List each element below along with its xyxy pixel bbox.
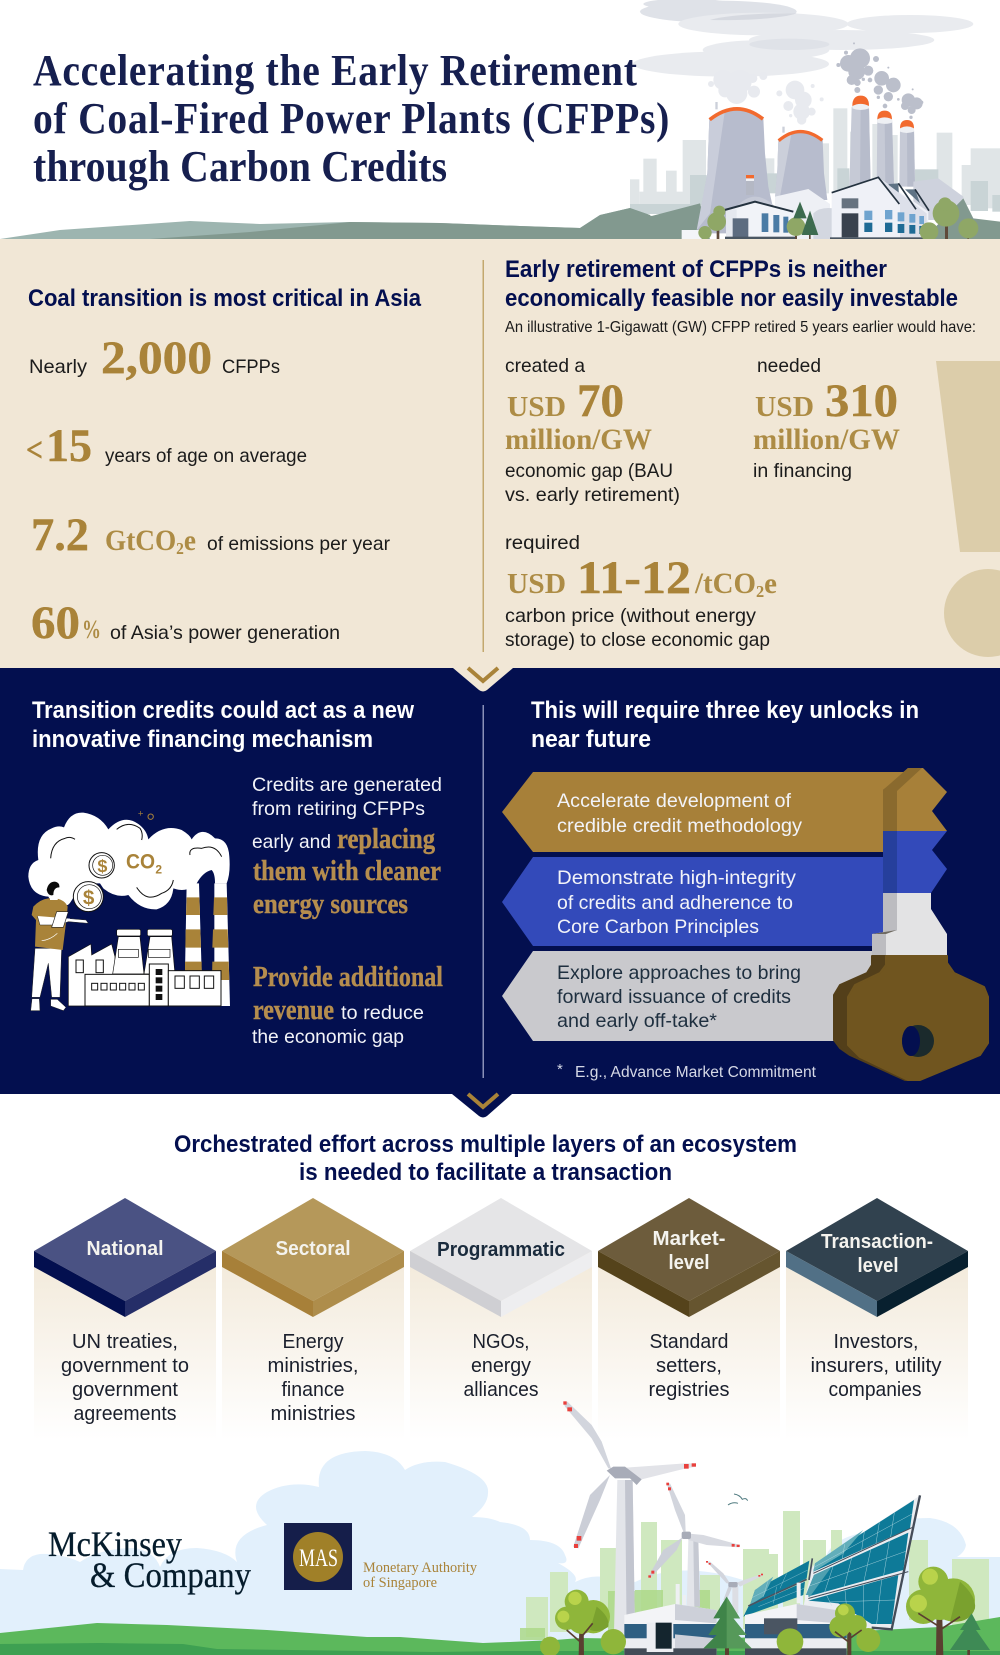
logo: McKinsey & Company: McKinsey	[48, 1524, 182, 1564]
stat: USD 11-12 per tCO2e: carbon price (without energy	[505, 605, 756, 627]
stat: USD 70 million per GW: 70	[577, 375, 624, 427]
text: additional revenue: to reduce	[341, 1002, 424, 1024]
column: Programmatic: NGOs,	[472, 1331, 530, 1353]
icon: key	[834, 768, 988, 1080]
stat: USD 70 million per GW: vs. early retirement)	[505, 484, 680, 506]
banner: accelerate development	[502, 772, 905, 852]
column: Programmatic: energy	[471, 1355, 531, 1377]
banner: accelerate development: credible credit methodology	[557, 815, 802, 837]
column: Sectoral: Energy	[282, 1331, 344, 1353]
stat: 2,000 CFPPs: 2,000	[101, 332, 212, 384]
column: Transaction-level: level	[858, 1255, 898, 1277]
text: credits generation	[252, 774, 442, 920]
stat: USD 11-12 per tCO2e: /tCO	[695, 567, 758, 600]
heading: orchestrated effort	[174, 1131, 797, 1186]
column: National: UN treaties,	[72, 1331, 178, 1353]
header illustration: coal plant	[630, 0, 1000, 241]
stat: USD 11-12 per tCO2e	[505, 532, 777, 651]
heading: key unlocks: near future	[531, 726, 651, 753]
icon: person, CO2 cloud, coins and factory: CO	[126, 849, 155, 873]
column: Market-level	[598, 1198, 780, 1440]
panel: beige band background	[0, 239, 1000, 668]
column: National: government	[72, 1379, 178, 1401]
stat: USD 70 million per GW: economic gap (BAU	[505, 460, 673, 482]
banner: demonstrate integrity: of credits and adherence to	[557, 892, 793, 914]
logo: McKinsey & Company: & Company	[90, 1555, 251, 1595]
stat: 7.2 GtCO2e: GtCO	[105, 524, 183, 557]
column: Transaction-level: insurers, utility	[810, 1355, 942, 1377]
icon: person, CO2 cloud, coins and factory: $	[97, 856, 107, 876]
icon: large exclamation mark dot	[944, 569, 1000, 657]
stat: 7.2 GtCO2e	[31, 509, 390, 561]
text: additional revenue	[252, 961, 443, 1048]
column: Programmatic: alliances	[464, 1379, 538, 1401]
column: Market-level: Market-	[652, 1228, 726, 1250]
column: Transaction-level: Transaction-	[821, 1231, 933, 1253]
stat: 2,000 CFPPs: Nearly	[29, 356, 87, 378]
stat: 60 percent: 60	[31, 597, 80, 649]
panel: three key unlocks	[502, 697, 988, 1081]
stat: 60 percent	[31, 597, 340, 649]
heading: orchestrated effort: Orchestrated effort across multiple layers of an ecosystem	[174, 1131, 797, 1158]
stat: USD 70 million per GW: million/GW	[505, 423, 652, 456]
stat: USD 11-12 per tCO2e: required	[505, 532, 580, 554]
stat: USD 11-12 per tCO2e: storage) to close economic gap	[505, 629, 770, 651]
column: Sectoral: finance	[282, 1379, 344, 1401]
logo: Monetary Authority of Singapore: MAS	[299, 1545, 338, 1572]
banner: forward issuance: forward issuance of credits	[557, 986, 791, 1008]
column: Market-level: setters,	[656, 1355, 722, 1377]
stat: USD 70 million per GW: created a	[505, 355, 585, 377]
panel: navy band background	[0, 668, 1000, 1094]
text: additional revenue: revenue	[253, 994, 334, 1026]
panel: transition credits	[28, 697, 443, 1048]
column: National: National	[86, 1238, 164, 1260]
stat: USD 11-12 per tCO2e: 2	[756, 582, 764, 601]
arrow: chevron tab into navy section	[453, 668, 513, 692]
stat: USD 11-12 per tCO2e: 11-12	[577, 552, 691, 604]
header hills	[0, 208, 650, 239]
icon: person, CO2 cloud, coins and factory	[28, 811, 230, 1011]
footer illustration: cloud and hills	[0, 1451, 1000, 1655]
title: of Coal-Fired Power Plants (CFPPs)	[33, 95, 669, 144]
heading: orchestrated effort: is needed to facilitate a transaction	[299, 1159, 672, 1186]
heading: key unlocks	[531, 697, 919, 753]
column: Sectoral	[222, 1198, 404, 1440]
icon: person, CO2 cloud, coins and factory: 2	[155, 862, 162, 876]
stat: 2,000 CFPPs	[29, 332, 280, 384]
heading: early retirement: Early retirement of CFPPs is neither	[505, 256, 887, 283]
column: Transaction-level: Investors,	[834, 1331, 918, 1353]
column: Transaction-level: companies	[828, 1379, 922, 1401]
footnote: E.g., Advance Market Commitment	[575, 1064, 817, 1081]
text: credits generation: energy sources	[253, 888, 408, 920]
icon: large exclamation mark bar	[936, 361, 1000, 552]
column: Programmatic: Programmatic	[437, 1239, 565, 1261]
heading: transition credits	[32, 697, 414, 753]
banner: accelerate development: Accelerate development of	[557, 790, 792, 812]
column: Sectoral: Sectoral	[276, 1238, 350, 1260]
column: Market-level: level	[668, 1252, 710, 1274]
text: credits generation: replacing	[337, 823, 435, 855]
stat: USD 70 million per GW	[505, 355, 680, 506]
column: Sectoral: ministries	[270, 1403, 356, 1425]
text: credits generation: them with cleaner	[253, 855, 441, 887]
heading: coal transition: Coal transition is most critical in Asia	[28, 285, 422, 312]
text: additional revenue: Provide additional	[253, 961, 443, 993]
banner: forward issuance: Explore approaches to bring	[557, 962, 801, 984]
stat: USD 11-12 per tCO2e: USD	[507, 568, 566, 600]
banner: forward issuance: and early off-take*	[557, 1010, 717, 1032]
logo: Monetary Authority of Singapore: of Singapore	[363, 1575, 437, 1591]
text: additional revenue: the economic gap	[252, 1026, 404, 1048]
title: Accelerating the Early Retirement	[33, 47, 637, 96]
column: Sectoral: ministries,	[268, 1355, 358, 1377]
banner: forward issuance	[502, 951, 872, 1041]
footnote: *	[557, 1061, 563, 1078]
heading: transition credits: innovative financing mechanism	[32, 726, 373, 753]
panel: coal transition stats	[26, 285, 422, 649]
banner: demonstrate integrity: Core Carbon Principles	[557, 916, 759, 938]
heading: early retirement	[505, 256, 958, 312]
stat: USD 310 million per GW: 310	[825, 375, 898, 427]
heading: transition credits: Transition credits could act as a new	[32, 697, 414, 724]
stat: USD 310 million per GW: in financing	[753, 460, 852, 482]
title	[33, 47, 669, 192]
stat: under 15 years	[26, 420, 307, 472]
stat: USD 310 million per GW: needed	[757, 355, 821, 377]
stat: USD 70 million per GW: USD	[507, 391, 566, 423]
stat: 7.2 GtCO2e: 2	[176, 539, 184, 558]
logo: McKinsey & Company	[48, 1524, 251, 1595]
stat: USD 310 million per GW: USD	[755, 391, 814, 423]
stat: 60 percent: of Asia’s power generation	[110, 622, 340, 644]
stat: USD 310 million per GW: million/GW	[753, 423, 900, 456]
text: credits generation: from retiring CFPPs	[252, 798, 425, 820]
stat: 7.2 GtCO2e: e	[184, 524, 196, 557]
column: National: agreements	[74, 1403, 176, 1425]
arrow: chevron tab into ecosystem section	[452, 1094, 512, 1118]
column: Programmatic	[410, 1198, 592, 1440]
title: through Carbon Credits	[33, 143, 447, 192]
column: National: government to	[61, 1355, 189, 1377]
text: credits generation: Credits are generated	[252, 774, 442, 796]
panel: early retirement economics	[505, 256, 976, 651]
stat: 7.2 GtCO2e: 7.2	[31, 509, 89, 561]
column: Market-level: registries	[648, 1379, 730, 1401]
footer illustration: wind turbines, solar panels, buildings, trees	[540, 1401, 990, 1655]
banner: demonstrate integrity: Demonstrate high-integrity	[557, 867, 796, 889]
stat: under 15 years: <	[26, 432, 43, 469]
text: credits generation: early and	[252, 831, 331, 853]
stat: 2,000 CFPPs: CFPPs	[222, 356, 280, 378]
stat: 60 percent: %	[82, 615, 101, 644]
banner: demonstrate integrity	[502, 857, 883, 946]
icon: person, CO2 cloud, coins and factory: $	[83, 887, 95, 910]
column: National	[34, 1198, 216, 1440]
stat: 7.2 GtCO2e: of emissions per year	[207, 533, 390, 555]
heading: key unlocks: This will require three key unlocks in	[531, 697, 919, 724]
heading: early retirement: economically feasible nor easily investable	[505, 285, 958, 312]
stat: USD 11-12 per tCO2e: e	[764, 567, 777, 600]
logo: Monetary Authority of Singapore	[284, 1523, 477, 1591]
column: Market-level: Standard	[650, 1331, 728, 1353]
stat: under 15 years: 15	[46, 420, 92, 472]
stat: USD 310 million per GW	[753, 355, 900, 482]
stat: under 15 years: years of age on average	[105, 445, 307, 467]
column: Transaction-level	[786, 1198, 968, 1440]
logo: Monetary Authority of Singapore: Monetary Authority	[363, 1560, 477, 1576]
